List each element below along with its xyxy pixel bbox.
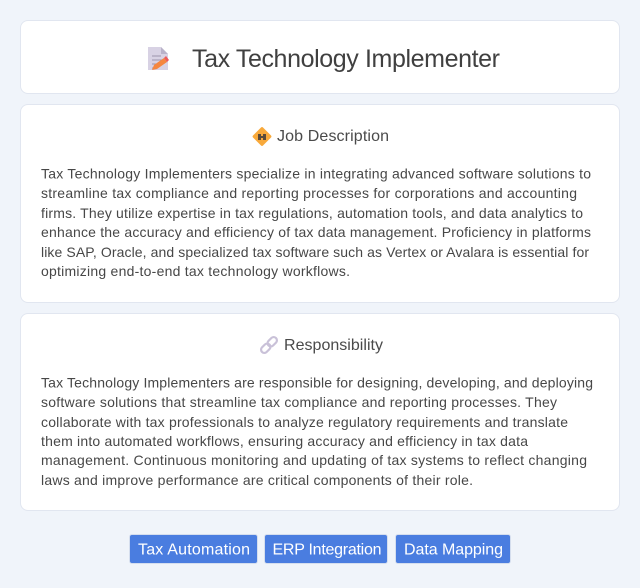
panel: job description [20, 104, 620, 303]
text block: responsibility: Tax Technology Implementers are responsible for designing, developing, and deploying [41, 374, 593, 390]
text block: responsibility: management. Continuous monitoring and updating of tax systems to reflect changing [41, 452, 587, 468]
heading: job description: Job Description [277, 128, 389, 145]
text block: job description: firms. They utilize expertise in tax regulations, automation tools, and data analytics to [41, 205, 583, 221]
text block: job description: like SAP, Oracle, and specialized tax software such as Vertex or Avalara is essential for [41, 244, 589, 260]
text block: responsibility: laws and improve performance are critical components of their role. [41, 472, 473, 488]
text block: job description: enhance the accuracy and efficiency of tax data management. Proficiency in platforms [41, 224, 591, 240]
tag: Tax Automation: Tax Automation [138, 542, 250, 558]
tag: Data Mapping [395, 534, 511, 564]
icon: diamond road sign [252, 127, 272, 146]
text block: responsibility: collaborate with tax professionals to analyze regulatory requirements and translate [41, 414, 568, 430]
icon: chain link [260, 336, 278, 354]
title: Tax Technology Implementer [192, 45, 500, 73]
tag: ERP Integration [264, 534, 388, 564]
heading: responsibility: Responsibility [284, 337, 383, 354]
text block: job description [41, 166, 591, 279]
panel: responsibility [20, 313, 620, 511]
text block: responsibility [41, 374, 593, 488]
text block: job description: streamline tax compliance and reporting processes for corporations and accounting [41, 185, 577, 201]
text block: responsibility: them into automated workflows, ensuring accuracy and efficiency in tax data [41, 433, 528, 449]
text block: job description: optimizing end-to-end tax technology workflows. [41, 263, 350, 279]
panel: title card [20, 20, 620, 94]
tag: Data Mapping: Data Mapping [404, 542, 503, 558]
tag: ERP Integration: ERP Integration [272, 542, 382, 558]
tag: Tax Automation [129, 534, 258, 564]
text block: job description: Tax Technology Implementers specialize in integrating advanced software solutions to [41, 166, 591, 182]
text block: responsibility: software solutions that streamline tax compliance and reporting processes. They [41, 394, 557, 410]
icon: memo with pencil [148, 47, 169, 70]
